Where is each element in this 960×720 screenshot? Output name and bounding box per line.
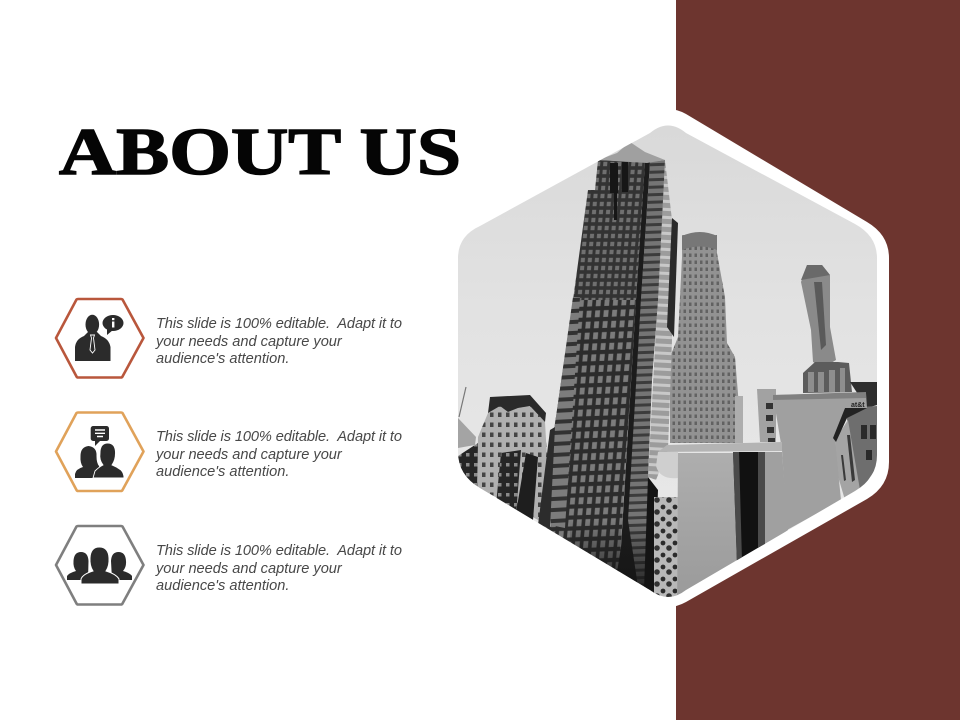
feature row 2	[56, 412, 402, 491]
brown side panel	[676, 0, 960, 720]
text block 3: audience's attention.	[156, 578, 289, 594]
icon: hexagon outline with businessman and info bubble	[56, 299, 144, 378]
text block 3: This slide is 100% editable. Adapt it to	[156, 543, 402, 559]
icon: hexagon outline with three person group	[56, 526, 144, 604]
black corner beside mural	[644, 477, 658, 596]
main tower window grid upper	[573, 160, 645, 300]
feature row 3	[56, 526, 402, 604]
far right tower	[801, 265, 852, 393]
main tower dark vertical strip	[615, 162, 650, 600]
feature row 1	[56, 299, 402, 378]
text block 2: This slide is 100% editable. Adapt it to	[156, 429, 402, 445]
main tower dark slots	[610, 162, 628, 220]
main tower light side face	[648, 160, 672, 480]
left building	[458, 387, 555, 528]
round bank tower	[670, 232, 743, 443]
text block 3: your needs and capture your	[155, 561, 343, 577]
text block 1: This slide is 100% editable. Adapt it to	[156, 316, 402, 332]
dark strip beside main tower	[667, 218, 678, 337]
main tower window grid lower	[540, 300, 636, 590]
photo: city skyscrapers in hexagon	[458, 126, 877, 597]
text block 2: your needs and capture your	[155, 447, 343, 463]
text block 2: audience's attention.	[156, 464, 289, 480]
main tower left edge bands	[550, 297, 580, 528]
main tower crown	[598, 142, 665, 163]
main tower right band face	[627, 160, 665, 600]
icon: hexagon outline with two people and chat bubble	[56, 412, 144, 491]
white hexagon frame	[444, 109, 889, 607]
mural wall	[654, 497, 678, 600]
text block 1: audience's attention.	[156, 351, 289, 367]
text block 1: your needs and capture your	[155, 334, 343, 350]
sign: at&t: at&t	[851, 402, 865, 409]
right hand buildings and walls	[658, 382, 877, 600]
title: ABOUT US	[59, 115, 461, 189]
curved ledge under tower	[656, 452, 678, 478]
dark shade at tower base	[570, 527, 652, 592]
